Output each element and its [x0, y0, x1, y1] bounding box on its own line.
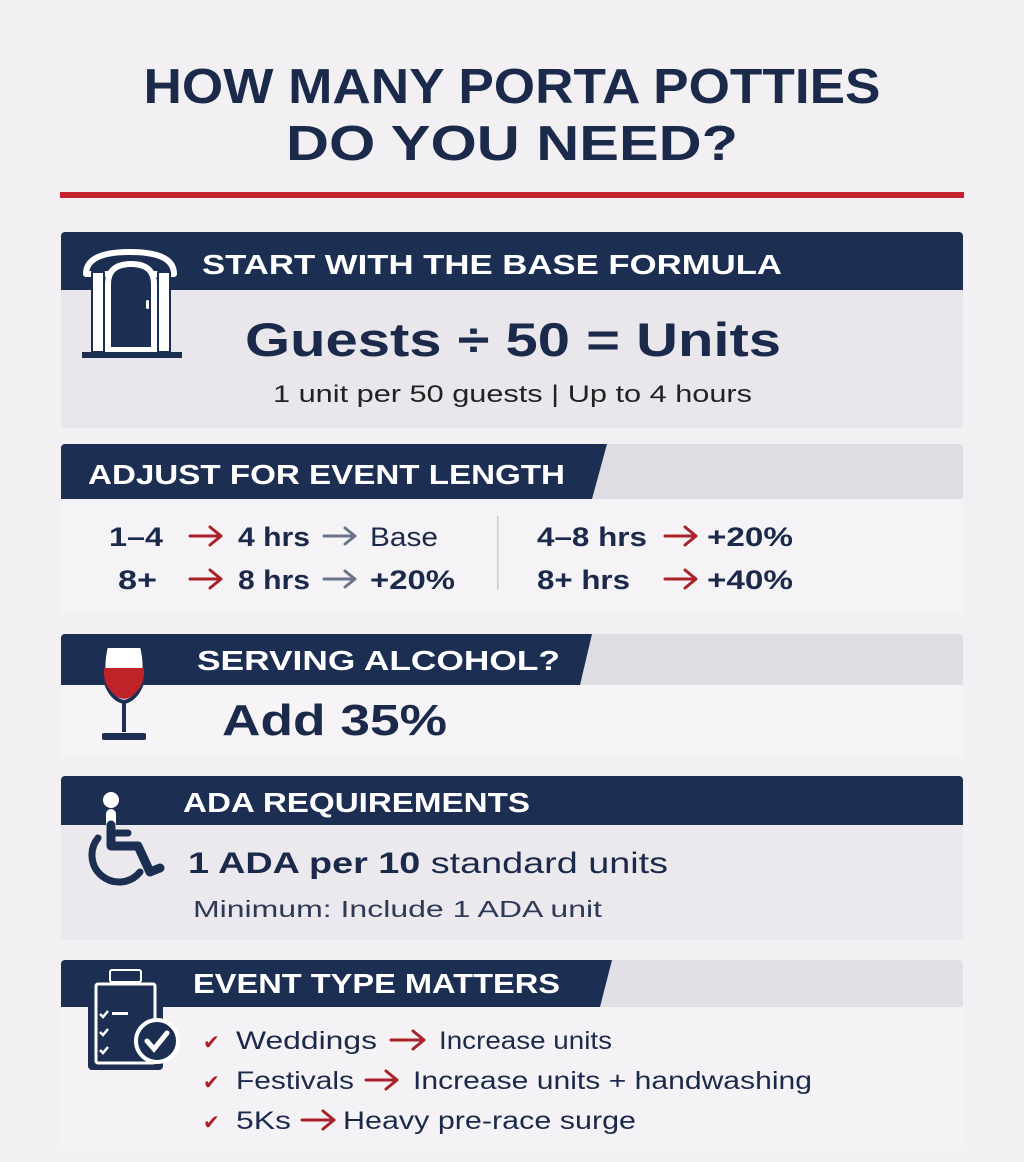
title — [144, 60, 880, 171]
subtext: 1 unit per 50 guests | Up to 4 hours — [273, 381, 752, 408]
rows: durations: +40% — [707, 565, 793, 595]
arrows: durations — [190, 527, 696, 588]
panel: base formula — [61, 232, 963, 428]
arrows: event types — [302, 1031, 424, 1129]
list: event types — [203, 1027, 812, 1135]
heading: ADA: ADA REQUIREMENTS — [183, 787, 530, 818]
title: HOW MANY PORTA POTTIES — [144, 60, 880, 114]
rows: durations: 1–4 — [109, 522, 163, 552]
list: event types: Increase units — [439, 1027, 612, 1055]
list: event types: Festivals — [236, 1067, 354, 1095]
list: event types: Increase units + handwashing — [413, 1067, 812, 1095]
rows: durations — [109, 522, 793, 595]
heading: event length: ADJUST FOR EVENT LENGTH — [88, 459, 565, 490]
stat: add 35%: Add 35% — [222, 696, 447, 745]
formula: Guests ÷ 50 = Units — [245, 313, 781, 366]
list: event types: Weddings — [236, 1027, 377, 1055]
list: event types: 5Ks — [236, 1107, 291, 1135]
icon: wine glass — [102, 646, 146, 740]
heading: alcohol: SERVING ALCOHOL? — [197, 645, 560, 676]
rows: durations: +20% — [707, 522, 793, 552]
rows: durations: 4–8 hrs — [537, 522, 647, 552]
rows: durations: Base — [370, 522, 438, 552]
panel: event length — [61, 444, 963, 614]
list: event types: ✔ — [203, 1072, 220, 1094]
heading: base formula: START WITH THE BASE FORMULA — [202, 249, 782, 280]
icon: clipboard — [88, 970, 178, 1070]
list: event types: ✔ — [203, 1032, 220, 1054]
rows: durations: +20% — [370, 565, 455, 595]
heading: event type: EVENT TYPE MATTERS — [193, 968, 560, 999]
list: event types: ✔ — [203, 1112, 220, 1134]
list: event types: Heavy pre-race surge — [343, 1107, 636, 1135]
rows: durations: 8+ hrs — [537, 565, 630, 595]
icon: porta potty — [82, 252, 182, 358]
title: DO YOU NEED? — [286, 117, 738, 171]
panel: ADA — [61, 776, 963, 940]
text: minimum: Minimum: Include 1 ADA unit — [193, 896, 603, 922]
text: ADA rule: 1 ADA per 10 standard units — [188, 847, 668, 880]
rows: durations: 8+ — [118, 565, 157, 595]
panel: alcohol — [61, 634, 963, 757]
rows: durations: 4 hrs — [238, 522, 310, 552]
rows: durations: 8 hrs — [238, 565, 310, 595]
icon: wheelchair — [92, 792, 160, 882]
panel: event type — [61, 960, 963, 1150]
